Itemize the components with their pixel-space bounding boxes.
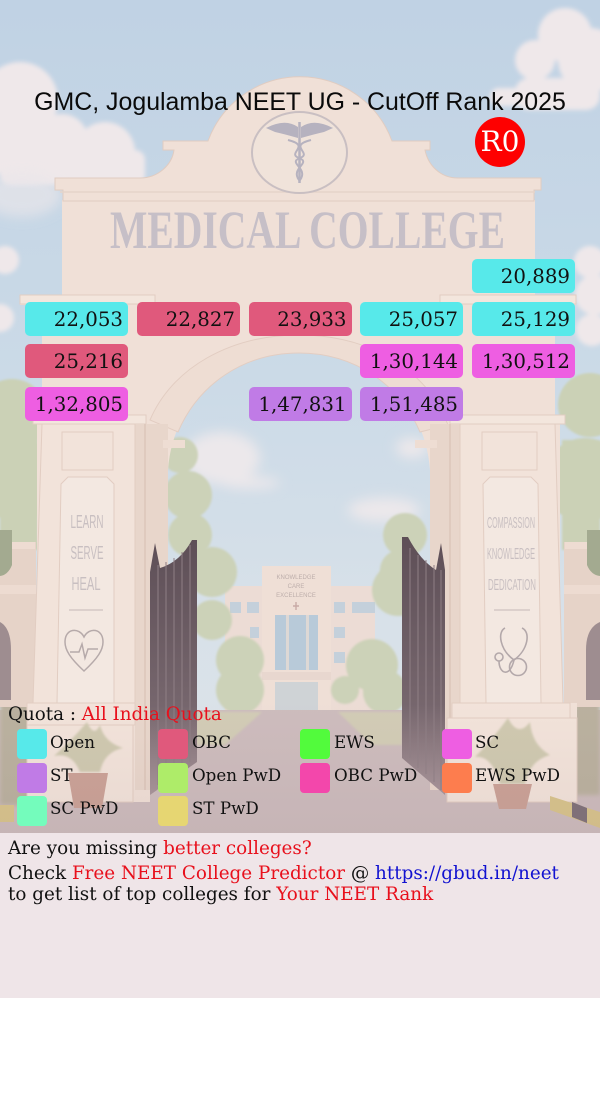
promo text line 2: Check Free NEET College Predictor @ https://gbud.in/neet xyxy=(8,863,559,884)
ground and path xyxy=(0,710,600,833)
arch and piers xyxy=(20,200,577,802)
legend swatch: OBC PwD xyxy=(300,763,330,792)
caduceus emblem xyxy=(252,112,347,193)
legend label: EWS: EWS xyxy=(334,732,375,752)
legend swatch: Open PwD xyxy=(158,763,188,792)
rank cell: 23,933 OBC: 23,933 xyxy=(277,308,346,330)
background illustration: medical college gate xyxy=(0,0,600,833)
rank cell: 20,889 Open: 20,889 xyxy=(501,264,570,288)
rank cell: 1,30,512 SC: 1,30,512 xyxy=(482,350,570,373)
rank cell: 25,216 OBC xyxy=(25,344,128,378)
rank cell: 25,216 OBC: 25,216 xyxy=(54,350,123,373)
rank cell: 1,30,144 SC xyxy=(360,344,463,378)
legend swatch: SC xyxy=(442,729,472,758)
legend label: Open PwD: Open PwD xyxy=(192,765,281,785)
rank cell: 22,827 OBC xyxy=(137,302,240,336)
legend swatch: EWS xyxy=(300,729,330,758)
building: CARE xyxy=(288,584,304,590)
legend swatch: SC PwD xyxy=(16,796,46,826)
left pier inscription: SERVE xyxy=(70,543,104,563)
rank cell: 25,129 Open xyxy=(472,302,575,336)
left pier inscription: HEAL xyxy=(72,574,100,594)
rank cell: 25,129 Open: 25,129 xyxy=(501,308,570,330)
background illustration: medical college gate: KNOWLEDGE xyxy=(487,546,535,563)
background illustration: medical college gate: DEDICATION xyxy=(488,577,536,594)
round badge R0 xyxy=(475,117,525,167)
rank cell: 22,053 Open xyxy=(25,302,128,336)
rank cell: 25,057 Open: 25,057 xyxy=(389,308,458,330)
side walls xyxy=(0,530,600,707)
rank cell: 22,827 OBC: 22,827 xyxy=(166,308,235,330)
panel: college predictor promo xyxy=(0,833,600,998)
pediment xyxy=(55,77,541,201)
rank cell: 22,053 Open: 22,053 xyxy=(54,308,123,330)
building xyxy=(225,566,375,711)
curb xyxy=(0,796,600,828)
opening clouds xyxy=(184,432,428,522)
rank cell: 25,057 Open xyxy=(360,302,463,336)
legend swatch: Open xyxy=(16,729,46,758)
rank cell: 1,32,805 SC: 1,32,805 xyxy=(35,393,123,416)
icon: stethoscope xyxy=(495,628,527,676)
legend xyxy=(17,729,560,826)
legend label: OBC PwD: OBC PwD xyxy=(334,765,417,785)
legend swatch: OBC xyxy=(158,729,188,758)
legend label: ST PwD: ST PwD xyxy=(192,798,259,818)
rank cell: 1,30,144 SC: 1,30,144 xyxy=(370,350,458,373)
legend swatch: EWS PwD xyxy=(442,763,472,792)
legend label: ST: ST xyxy=(50,765,73,785)
promo text line 3: to get list of top colleges for Your NEET Rank xyxy=(8,884,433,905)
rank cell: 20,889 Open xyxy=(472,258,575,292)
rank cell: 1,47,831 ST: 1,47,831 xyxy=(258,393,346,416)
right pier inscription xyxy=(487,515,536,594)
building: KNOWLEDGE xyxy=(276,575,316,581)
legend label: EWS PwD: EWS PwD xyxy=(475,765,560,785)
icon: heart xyxy=(65,630,103,671)
pier detail xyxy=(27,424,577,802)
legend swatch: ST xyxy=(16,763,46,792)
rank cell: 1,51,485 ST xyxy=(360,387,463,421)
left pier inscription: LEARN xyxy=(70,512,104,532)
quota heading: Quota : All India Quota xyxy=(8,704,222,725)
legend label: OBC: OBC xyxy=(192,732,231,752)
gate leaves xyxy=(150,537,445,795)
rank cell: 1,30,512 SC xyxy=(472,344,575,378)
rank cell: 23,933 OBC xyxy=(248,302,352,336)
legend label: SC PwD: SC PwD xyxy=(50,798,118,818)
building: EXCELLENCE xyxy=(276,593,316,599)
legend label: Open: Open xyxy=(50,732,95,752)
rank cell: 1,32,805 SC xyxy=(25,387,128,421)
round badge R0: R0 xyxy=(481,125,519,158)
background illustration: medical college gate: COMPASSION xyxy=(487,515,535,532)
left pier inscription xyxy=(70,512,104,594)
rank cell: 1,47,831 ST xyxy=(248,387,352,421)
legend swatch: ST PwD xyxy=(158,796,188,826)
promo text line 1: Are you missing better colleges? xyxy=(8,838,312,859)
planters xyxy=(54,718,550,809)
legend label: SC: SC xyxy=(475,732,499,752)
rank cell: 1,51,485 ST: 1,51,485 xyxy=(370,393,458,416)
title: GMC, Jogulamba NEET UG - CutOff Rank 2025 xyxy=(34,88,566,116)
